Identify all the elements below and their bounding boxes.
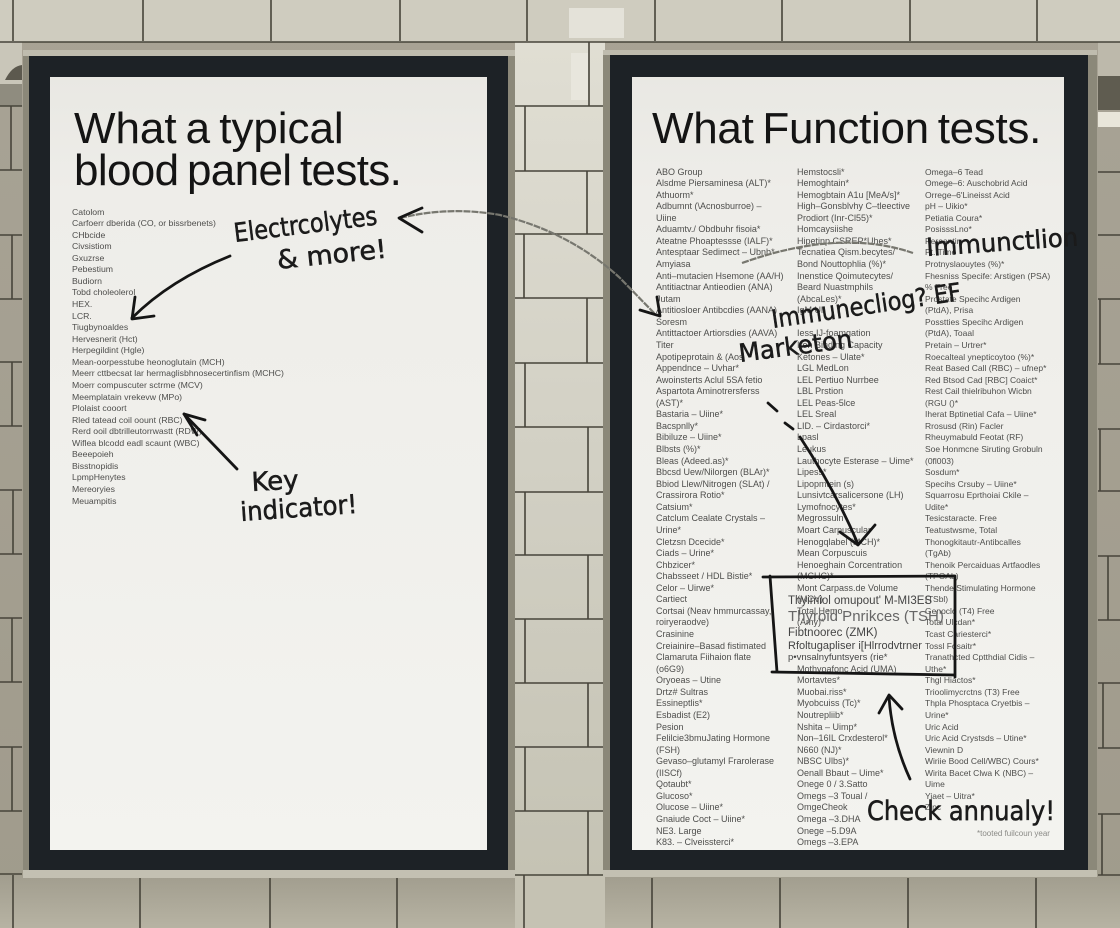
boxed overlapping text: Thyimiol omupout' M-MI3ES — [788, 595, 932, 607]
boxed overlapping text: Rfoltugapliser i[Hlrrodvtrner — [788, 640, 922, 652]
left poster frame — [23, 50, 515, 878]
note: Electrolytes and more: Electrcolytes — [232, 202, 379, 249]
footnote: *tooted fuilcoun year — [977, 829, 1050, 838]
right poster title: What Function tests. — [652, 104, 1041, 153]
right poster list: column 2: Hemstocsli* Hemoghtain* Hemogbtain A1u [MeA/s]* High–Gonsblvhy C–tleective Prodiort (Inr-Cl55)* Homcaysiishe Hipetinp CSREP*Uhes* Tecnatiea Qism.becytes/ Bond Nouttophlia (%)* Inenstice Qoimutecytes/ Beard Nuastmphils (AbcaLes)* IgM Ul Iess IJ-foamgation Iron Binding Capacity Ketones – Ulate* LGL MedLon LEL Pertiuo Nurrbee LBL Prstion LEL Peas-5lce LEL Sreal LID. – Cirdastorci* Lpasl Leukus Lauthocyte Esterase – Uime* Lipess* Lipopmtein (s) Lunsivtcarsalicersone (LH) Lymofnocytes* Megrossuln Moart Carpuscular Henogqlabel (MCH)* Mean Corpuscuis Henoeghain Corcentration (MCHC)* Mont Carpass.de Volume (MCV) Total Hemo (Amy)* Mothyoafonc Acid (UMA) Mortavtes* Muobai.riss* Myobcuiss (Tc)* Noutrepliib* Nshita – Uimp* Non–16IL Crxdesterol* N660 (NJ)* NBSC Ulbs)* Oenall Bbaut – Uime* Onege 0 / 3.Satto Omegs –3 Toual / OmgeCheok Omega –3.DHA Onege –5.D9A Omegs –3.EPA — [797, 166, 914, 847]
boxed overlapping text: p•vnsalnyfuntsyers (rie* — [788, 652, 887, 663]
right poster list: column 1: ABO Group Alsdme Piersaminesa (ALT)* Athuorm* Adbumnt (\Acnosburroe) – Uiine Aduamtv./ Obdbuhr fisoia* Ateatne Phoaptessse (IALF)* Antesptaar Sedimect – Ubnb* Amyiasa Anti–mutacien Hsemone (AA/H) Antitiactnar Antieodien (ANA) Jutam Antitiosloer Antibcdies (AANA) Soresm Antittactoer Artiorsdies (AAVA) Titer Apotipeprotain & (Aos Appendnce – Uvhar* Awoinsterts Aclul 5SA fetio Aspartota Aminotrersferss (AST)* Bastaria – Uiine* Bacspnlly* Bibiluze – Uiine* Blbsts (%)* Bleas (Adeed.as)* Bbcsd Uew/Nilorgen (BLAr)* Bbiod Llew/Nitrogen (SLAt) / Crassirora Rotio* Catsium* Catclum Cealate Crystals – Urine* Cletzsn Dcecide* Ciads – Urine* Chbzicer* Chabsseet / HDL Bistie* Celor – Uirwe* Cartiect Cortsai (Neav hmmurcassay, roiryeraodve) Crasinine Creiainire–Basad fistimated Clamaruta Fiihaion flate (o6G9) Oryoeas – Utine Drtz# Sultras Essineptlis* Esbadist (E2) Pesion Felilcie3bmuJating Hormone (FSH) Gevaso–glutamyl Frarolerase (IISCf) Qotaubt* Glucoso* Olucose – Uiine* Gnaiude Coct – Uiine* NE3. Large K83. – Clveissterci* — [656, 166, 784, 847]
note: Key indicator: indicator! — [239, 490, 358, 528]
boxed overlapping text: Thyroid Pnrikces (TSH) — [788, 608, 944, 625]
note: Key indicator — [239, 466, 358, 528]
left poster test list: Catolom Carfoerr dberida (CO, or bissrbenets) CHbcide Civsistiom Gxuzrse Pebestium Budiorn Tobd choleolerol HEX. LCR. Tiugbynoaldes Hervesnerit (Hct) Herpegildint (Hgle) Mean-oorpesstube heonoglutain (MCH) Meerr cttbecsat lar hermaglisbhnosecertinfism (MCHC) Moerr compuscuter sctrme (MCV) Meemplatain vrekevw (MPo) Plolaist cooort Rled tatead coil oount (RBC) Rerd ooil dbtrilleutorrwastt (RDW) Wiflea blcodd eadl scaunt (WBC) Beeepoieh Bisstnopidis LpmpHenytes Mereoryies Meuampitis — [72, 206, 284, 506]
left poster title: What a typical blood panel tests. — [74, 104, 401, 195]
note: Check annualy: Check annualy! — [867, 796, 1055, 827]
right poster frame — [603, 50, 1097, 877]
faint arc across right poster — [742, 243, 913, 263]
right poster list: column 3: Omega–6 Tead Omege–6: Auschobrid Acid Orrege–6'Lineisst Acid pH – Uikio* Petiatia Coura* PosisssLno* Pereantin Pt. Time Protnyslaouytes (%)* Fhesniss Specife: Arstigen (PSA) % Free Prostate Specihc Ardigen (PtdA), Prisa Posstties Specihc Ardigen (PtdA), Toaal Pretain – Urtrer* Roecalteal ynepticoytoo (%)* Reat Based Call (RBC) – ufnep* Red Btsod Cad [RBC] Coaict* Rest Cail thielribuhon Wicbn (RGU ()* Iherat Bptinetial Cafa – Uiine* Rrosusd (Rin) Facler Rheuymabuld Feotat (RF) Soe Honmcne Siruting Grobuln (0fl003) Sosdum* Specihs Crsuby – Uiine* Squarrosu Eprthoiai Ckile – Udite* Tesicstaracte. Free Teatustwsme, Total Thonogkitautr-Antibcalles (TgAb) Thenoik Percaiduas Artfaodles (TPOAb) Thende Stimulating Hormone (TSbl) Genoclo (T4) Free Total Ulcdan* Tcast Cariesterci* Tossl Fosaitr* Tranathcted Cptthdial Cidis – Uthe* Thgl Hiactos* Trioolimycrctns (T3) Free Thpla Phosptaca Cryetbis – Urine* Uric Acid Uric Acid Crystsds – Utine* Viewnin D Wiriie Bood Cell/WBC) Cours* Wirita Bacet Clwa K (NBC) – Uime Yiaet – Uitra* Zinc — [925, 166, 1050, 812]
arrow: key indicator to list — [184, 414, 237, 469]
note: Electrolytes and more — [232, 202, 388, 276]
note: Key indicator: Key — [251, 466, 299, 498]
arrow: dashed arrow down to box — [768, 403, 875, 545]
arrow: check annually up to box — [879, 695, 910, 779]
boxed overlapping text: Fibtnoorec (ZMK) — [788, 627, 877, 639]
note: Marketon: Marketon — [737, 324, 854, 368]
note: Immunecliog EF: Immunecliog? EF — [770, 277, 963, 334]
hand-drawn box — [763, 576, 955, 677]
boxed overlapping text — [788, 595, 944, 663]
arrow: long curved link between posters — [399, 208, 660, 316]
arrow: electrolytes to list — [132, 256, 230, 319]
note: Electrolytes and more: & more! — [276, 235, 388, 276]
note: Immunction: Immunctlion — [925, 222, 1079, 262]
